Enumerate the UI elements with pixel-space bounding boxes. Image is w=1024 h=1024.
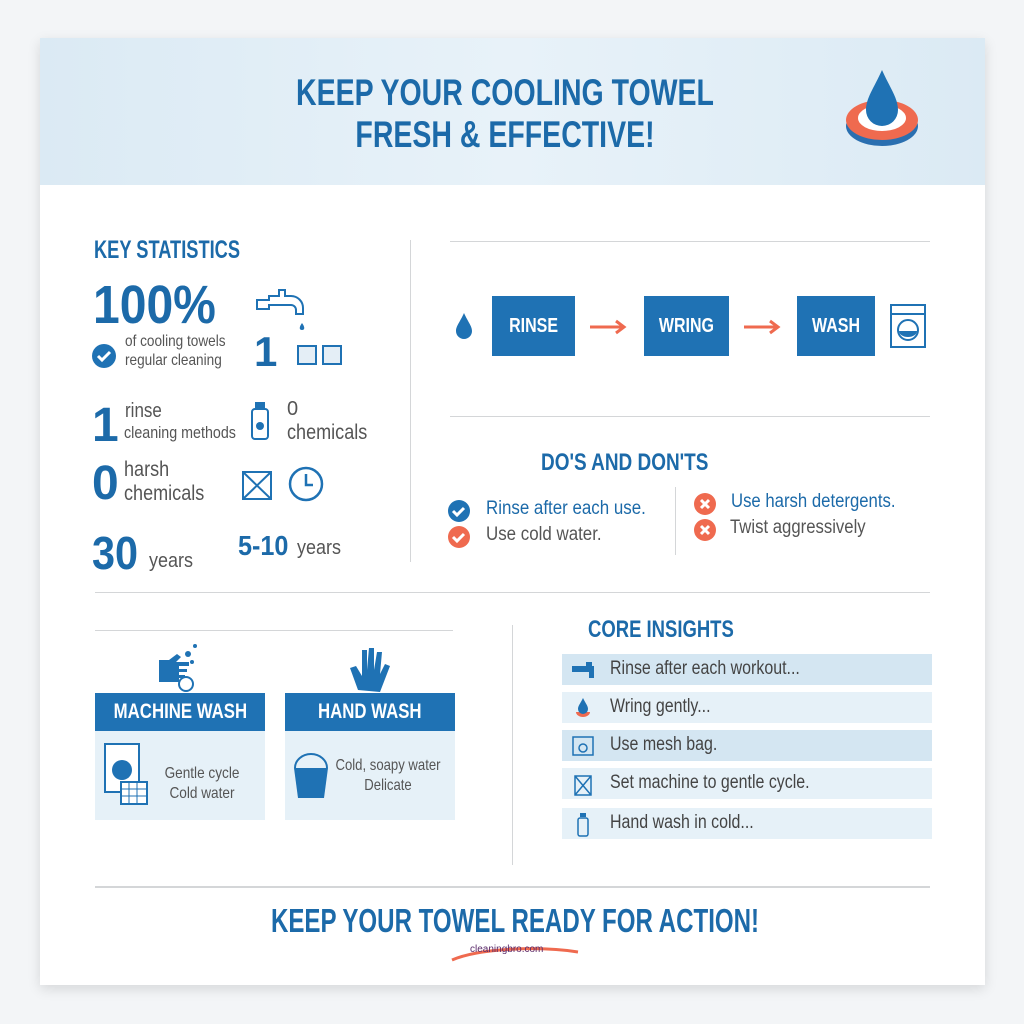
don'ts list bbox=[694, 491, 896, 541]
stats block: chemicals bbox=[287, 421, 367, 444]
stats block: 30 bbox=[92, 527, 138, 579]
panel: machine wash: MACHINE WASH bbox=[113, 700, 247, 723]
do's list bbox=[448, 498, 646, 548]
icon: water drop logo bbox=[846, 70, 918, 146]
stats block: chemicals bbox=[124, 482, 204, 505]
process flow bbox=[456, 296, 926, 356]
title bbox=[296, 72, 714, 155]
header band bbox=[40, 38, 985, 185]
heading: do's and don'ts: DO'S AND DON'TS bbox=[541, 449, 708, 476]
footer brand: cleaningbro.com bbox=[470, 944, 543, 955]
do's list: Rinse after each use. bbox=[486, 498, 646, 519]
heading: key statistics: KEY STATISTICS bbox=[94, 236, 240, 264]
don'ts list: Twist aggressively bbox=[730, 517, 866, 538]
stats block: harsh bbox=[124, 458, 169, 481]
core insights list: Rinse after each workout... bbox=[610, 658, 800, 679]
stats block: 0 bbox=[92, 457, 119, 510]
stats block: cleaning methods bbox=[124, 423, 236, 442]
panel: machine wash: Cold water bbox=[169, 785, 234, 802]
footer brand bbox=[452, 944, 578, 962]
stats block: years bbox=[297, 537, 341, 559]
core insights list bbox=[562, 654, 932, 839]
stats block: years bbox=[149, 550, 193, 572]
title: KEEP YOUR COOLING TOWEL bbox=[296, 72, 714, 113]
don'ts list: Use harsh detergents. bbox=[731, 491, 896, 512]
process flow: RINSE bbox=[509, 314, 558, 336]
stats block: 100% bbox=[93, 275, 216, 335]
do's list: Use cold water. bbox=[486, 524, 602, 545]
stats block: 1 bbox=[254, 328, 277, 375]
panel: hand wash: Delicate bbox=[364, 777, 412, 794]
stats block: 1 bbox=[92, 399, 119, 452]
stats block: regular cleaning bbox=[125, 352, 222, 369]
panel: machine wash: Gentle cycle bbox=[165, 765, 239, 782]
stats block: of cooling towels bbox=[125, 333, 226, 350]
panel: hand wash bbox=[285, 648, 455, 820]
stats block: 0 bbox=[287, 398, 298, 420]
stats block: 5-10 bbox=[238, 530, 288, 561]
panel: machine wash bbox=[95, 644, 265, 820]
heading: core insights: CORE INSIGHTS bbox=[588, 616, 734, 643]
panel: hand wash: HAND WASH bbox=[318, 700, 422, 723]
process flow: WASH bbox=[812, 314, 860, 336]
core insights list: Use mesh bag. bbox=[610, 734, 717, 755]
core insights list: Set machine to gentle cycle. bbox=[610, 772, 810, 793]
stats block bbox=[92, 275, 367, 579]
footer tagline: KEEP YOUR TOWEL READY FOR ACTION! bbox=[271, 902, 759, 939]
title: FRESH & EFFECTIVE! bbox=[355, 114, 655, 155]
process flow: WRING bbox=[659, 314, 714, 336]
stats block: rinse bbox=[125, 400, 162, 422]
core insights list: Wring gently... bbox=[610, 696, 711, 717]
panel: hand wash: Cold, soapy water bbox=[335, 757, 441, 774]
core insights list: Hand wash in cold... bbox=[610, 812, 754, 833]
